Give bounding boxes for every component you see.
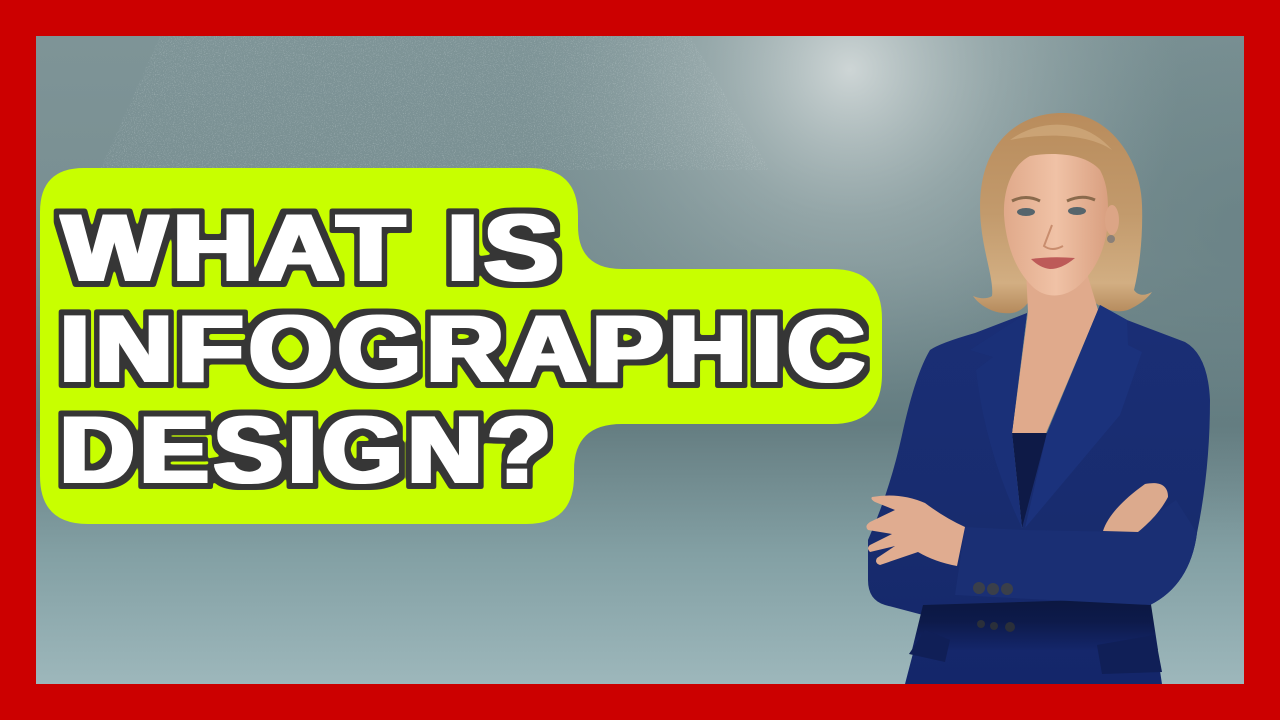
mouth (1031, 257, 1075, 269)
sleeve buttons (973, 582, 1013, 595)
hair shine (1010, 125, 1112, 150)
right hand (1103, 483, 1168, 532)
left lapel (970, 313, 1027, 528)
face (1004, 154, 1108, 296)
eyebrows (1012, 197, 1095, 201)
pocket flaps (909, 630, 1162, 674)
right lapel (1025, 305, 1142, 528)
left hand with ring (866, 495, 965, 566)
presenter: woman in navy suit with crossed arms (866, 113, 1210, 684)
title line 1: WHAT IS (62, 195, 564, 300)
neck and chest (1012, 270, 1098, 433)
panel: lime title badge (40, 168, 882, 524)
title line 3: DESIGN? (60, 397, 556, 502)
title: What Is Infographic Design? (60, 195, 870, 502)
shadow under arms (912, 598, 1158, 650)
hair (973, 113, 1152, 313)
forearm sleeve (955, 500, 1197, 605)
eyes (1017, 207, 1086, 216)
jacket body (868, 305, 1210, 684)
jacket closing buttons (977, 620, 1015, 632)
inner top (1012, 433, 1047, 528)
ear and earring (1105, 205, 1119, 243)
title line 2: INFOGRAPHIC (60, 296, 870, 401)
nose (1044, 225, 1063, 249)
